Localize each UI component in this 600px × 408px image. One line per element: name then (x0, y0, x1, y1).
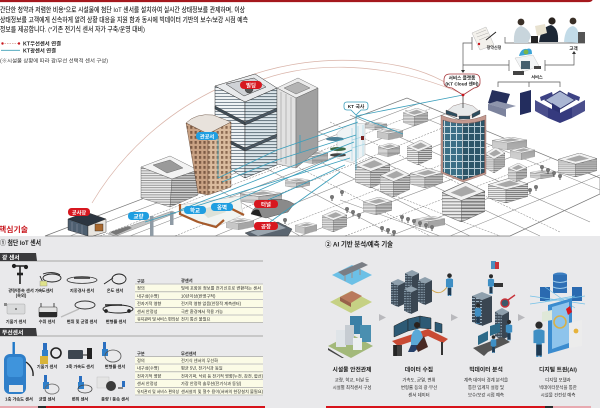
table: wireless sensor specification: 전자기적 영향 (137, 372, 161, 380)
table: optical sensor specification: 전기 통신 불필요 (181, 316, 210, 322)
column text: 데이터 수집: 가속도, 균열, 변위 (402, 376, 436, 384)
optical sensor labels: 온도 센서 (107, 287, 123, 294)
table: optical sensor specification: 10년이상(반영구적) (181, 292, 216, 300)
table: wireless sensor specification: 센서 안정성 (137, 380, 158, 387)
legend: sensor connections (1, 40, 61, 54)
label: 공사장 (68, 208, 90, 216)
column icon: data collection (391, 270, 453, 356)
table: optical sensor specification: 극한 환경에서 적용 가능 (181, 308, 223, 315)
table: wireless sensor specification: 정의 (137, 357, 145, 364)
table: wireless sensor specification: 전자기파, 낙뢰 등 전기적 영향(누전, 감전, 합선) (181, 372, 264, 380)
label: 관공서: 관공서 (200, 132, 214, 140)
wireless sensor labels: 1축 가속도 센서 (5, 396, 33, 402)
wireless sensor labels: 풍량 / 풍속 센서 (101, 396, 129, 402)
building: tall gray tower (277, 78, 318, 168)
column text: 시설물 안전관제 (333, 366, 371, 391)
optical sensor labels: (옥외) (16, 292, 27, 299)
service flow diagram (461, 17, 585, 123)
icon: server platform (535, 91, 585, 123)
table: wireless sensor specification: 가장 안정적 솔루션(전기식과 동일) (181, 380, 242, 387)
optical sensor labels: 기울기 센서 (6, 318, 26, 325)
column text: 디지털 트윈 (539, 366, 577, 398)
column text: 빅데이터 분석: 보수/보강 시점 예측 (468, 392, 504, 398)
callout: service platform (444, 74, 480, 96)
callout: service platform: 서비스 플랫폼 (449, 74, 476, 82)
heading: 첨단 IoT 센서: ① 첨단 IoT 센서 (0, 238, 41, 247)
optical sensor icons (4, 264, 133, 317)
column text: 빅데이터 분석: 빅데이터 분석 (469, 366, 503, 374)
label: 옹벽 (211, 203, 233, 211)
bottom bar: right (326, 406, 591, 408)
label: 빌딩: 빌딩 (246, 81, 256, 89)
label: 교량: 교량 (134, 212, 143, 220)
legend: sensor connections: KT광센서 연결 (23, 46, 56, 54)
table: optical sensor specification: 빛에 포함된 정보를 전기신호로 변환하는 센서 (181, 284, 261, 292)
column text: 데이터 수집: 변형률 등의 광·무선 (401, 384, 437, 391)
building: KT office (326, 123, 365, 163)
column text: 시설물 안전관제: 시설물 안전관제 (333, 366, 371, 374)
table: wireless sensor specification: 센서설치 및 철수 용이(서버의 현장설치 불필요) (181, 388, 264, 395)
table: optical sensor specification: 정의 (137, 284, 145, 292)
table: wireless sensor specification (135, 350, 264, 395)
label: 고객: 고객 (569, 45, 578, 52)
label: 터널 (254, 200, 278, 208)
column icon: big data analysis (472, 261, 515, 356)
building: tan government office (186, 115, 231, 195)
wireless sensor labels: 균열 센서 (39, 396, 55, 402)
icon: customer meeting (514, 17, 585, 43)
sensor: wind (12, 264, 28, 284)
column text: 시설물 안전관제: 시설별 최적센서 구성 (333, 384, 371, 391)
building: gray low-rise office (141, 156, 198, 207)
table: optical sensor specification: 구분 (137, 278, 145, 284)
building: construction site (68, 212, 106, 236)
sensor: strain (103, 305, 133, 313)
tunnel (251, 199, 294, 218)
table: optical sensor specification: 광센서 (181, 277, 193, 284)
label: 학교 (184, 206, 206, 214)
sensor: displacement (61, 301, 95, 317)
arrow 3 (518, 314, 525, 321)
label: 빌딩 (240, 81, 262, 89)
section band: optical sensors: 광 센서 (2, 254, 20, 262)
sensor: temperature (104, 274, 126, 284)
icon: tablet (520, 90, 531, 115)
column icon: digital twin (530, 272, 585, 357)
heading: AI 분석 예측 기술: ② AI 기반 분석/예측 기술 (325, 240, 393, 248)
city map: isometric ground and roads (45, 98, 600, 236)
table: optical sensor specification: 내구성(수명) (137, 292, 160, 300)
background: lower technology panel (0, 236, 600, 408)
city trees (275, 165, 562, 236)
arrow 2 (451, 314, 458, 321)
intro text block: 간단한 청약과 저렴한 비용*으로 시설물에 첨단 IoT 센서를 설치하여 실시간 상태정보를 관제하며, 이상 (0, 5, 245, 14)
bridge (108, 211, 176, 236)
label: 서비스: 서비스 (531, 74, 543, 80)
KT optical fibre connection lines (145, 95, 463, 222)
label: 학교: 학교 (190, 206, 200, 214)
arrow 1 (379, 314, 386, 321)
intro text block (0, 5, 248, 33)
sensor: wireless wind (97, 377, 125, 391)
school with brown retaining walls (180, 196, 244, 227)
label: 교량 (128, 212, 149, 220)
column text: 시설물 안전관제: 교량, 학교, 터널 등 (335, 376, 369, 384)
table: wireless sensor specification: 구분 (137, 350, 145, 357)
wireless sensor labels: 변위 센서 (72, 396, 88, 402)
sensor: acceleration (40, 273, 61, 286)
column text: 빅데이터 분석: 계측 데이터 경계 분석을 (464, 376, 508, 384)
optical sensor labels: 변위 및 균열 센서 (67, 318, 97, 325)
table: optical sensor specification: 전자기적 영향 (137, 300, 161, 307)
bottom bar: left (0, 406, 265, 408)
optical sensor labels: 수위 센서 (39, 318, 55, 325)
label: 청약신청: 청약신청 (487, 44, 502, 50)
column text: 빅데이터 분석: 통한 임계치 설정 및 (468, 384, 504, 391)
section band: optical sensors (0, 253, 263, 262)
column text: 데이터 수집: 데이터 수집 (405, 366, 433, 374)
section band: wireless sensors: 무선센서 (2, 328, 23, 336)
callout: service platform: (KT Cloud 센터) (445, 80, 479, 88)
wireless sensor labels (5, 363, 129, 402)
red wireless connection arcs (92, 60, 463, 203)
wireless sensor labels: 변형률 센서 (105, 363, 125, 370)
optical sensor labels: 변형률 센서 (106, 318, 126, 325)
legend: sensor connections: KT무선센서 연결 (23, 40, 61, 48)
top red frame line (0, 0, 592, 1)
table: wireless sensor specification: 내구성(수명) (137, 365, 160, 372)
intro text block: 정보를 제공합니다. (*기존 전기식 센서 자가 구축/운영 대비) (0, 24, 145, 33)
column text: 데이터 수집 (401, 366, 437, 398)
legend note: (※시설물 상황에 따라 광/무선 선택적 센서 구성) (0, 58, 108, 64)
optical sensor labels: 지중경사 센서 (70, 287, 94, 294)
building: dark gray skyscraper (215, 74, 277, 178)
icon: application document (472, 27, 496, 50)
column text: 데이터 수집: 센서 데이터 (408, 392, 430, 398)
column text: 디지털 트윈: 디지털 트윈(AI) (539, 366, 577, 374)
icon: service screens (513, 49, 541, 75)
label: 관공서 (196, 132, 218, 140)
sensor: tilt (4, 303, 25, 314)
wireless sensor labels: 3축 가속도 센서 (66, 363, 94, 370)
small city buildings (226, 108, 597, 234)
flow lines (463, 37, 585, 87)
factory (245, 222, 292, 236)
sensor: wireless crack (43, 375, 59, 394)
column icon: facilities (328, 262, 373, 358)
building: KT Cloud center glass tower (441, 96, 486, 182)
label: 공장: 공장 (261, 222, 271, 230)
label: 옹벽: 옹벽 (217, 203, 227, 211)
wireless sensor icons (4, 342, 125, 394)
large gray building in front (442, 182, 485, 222)
table: optical sensor specification: 센서 안정성 (137, 308, 158, 315)
section band: wireless sensors (0, 328, 263, 336)
column text: 디지털 트윈: 빅데이터분석을 통한 (539, 384, 577, 391)
callout: KT office: KT 국사 (348, 103, 365, 110)
optical sensor labels: 광량/풍속 센서 (8, 287, 34, 294)
intro text block: 상태정보를 고객에게 신속하게 알려 상황 대응을 지원 함과 동시에 빅데이터 기반의 보수/보강 시점 예측 (0, 15, 248, 24)
sensor: wireless displacement (78, 376, 92, 393)
sensor: water level (39, 303, 57, 317)
sensor: inclinometer (67, 277, 97, 283)
column text: 디지털 트윈: 시설물 건전성 예측 (541, 392, 575, 398)
sensor: wireless 3-axis (68, 348, 92, 359)
label: 공사장: 공사장 (72, 208, 86, 216)
table: optical sensor specification (135, 277, 263, 323)
icon: laptop (488, 90, 516, 117)
callout: KT office (344, 102, 368, 115)
optical sensor labels (6, 287, 126, 325)
sensor: wireless tilt (40, 343, 61, 364)
wireless sensor labels: 기울기 센서 (37, 363, 57, 370)
column text: 디지털 트윈: 디지털 모델과 (545, 376, 571, 384)
table: wireless sensor specification: 평균 5년, 전기식과 동일 (181, 365, 223, 372)
table: wireless sensor specification: 유지관리 및 서비스 편의성 (137, 388, 179, 395)
label: 터널: 터널 (261, 200, 271, 208)
label: 공장 (254, 222, 278, 230)
table: optical sensor specification: 유지관리 및 서비스 편의성 (137, 316, 179, 322)
table: wireless sensor specification: 전기식 센서의 무선화 (181, 357, 218, 364)
column text: 빅데이터 분석 (464, 366, 508, 398)
table: wireless sensor specification: 무선센서 (181, 350, 197, 357)
sensor: single axis wireless unit (4, 342, 33, 394)
sensor: wireless strain (102, 342, 121, 362)
optical sensor labels: 가속도 센서 (35, 287, 53, 294)
table: optical sensor specification: 전기적 영향 없음(안정적 계측센터) (181, 300, 242, 307)
